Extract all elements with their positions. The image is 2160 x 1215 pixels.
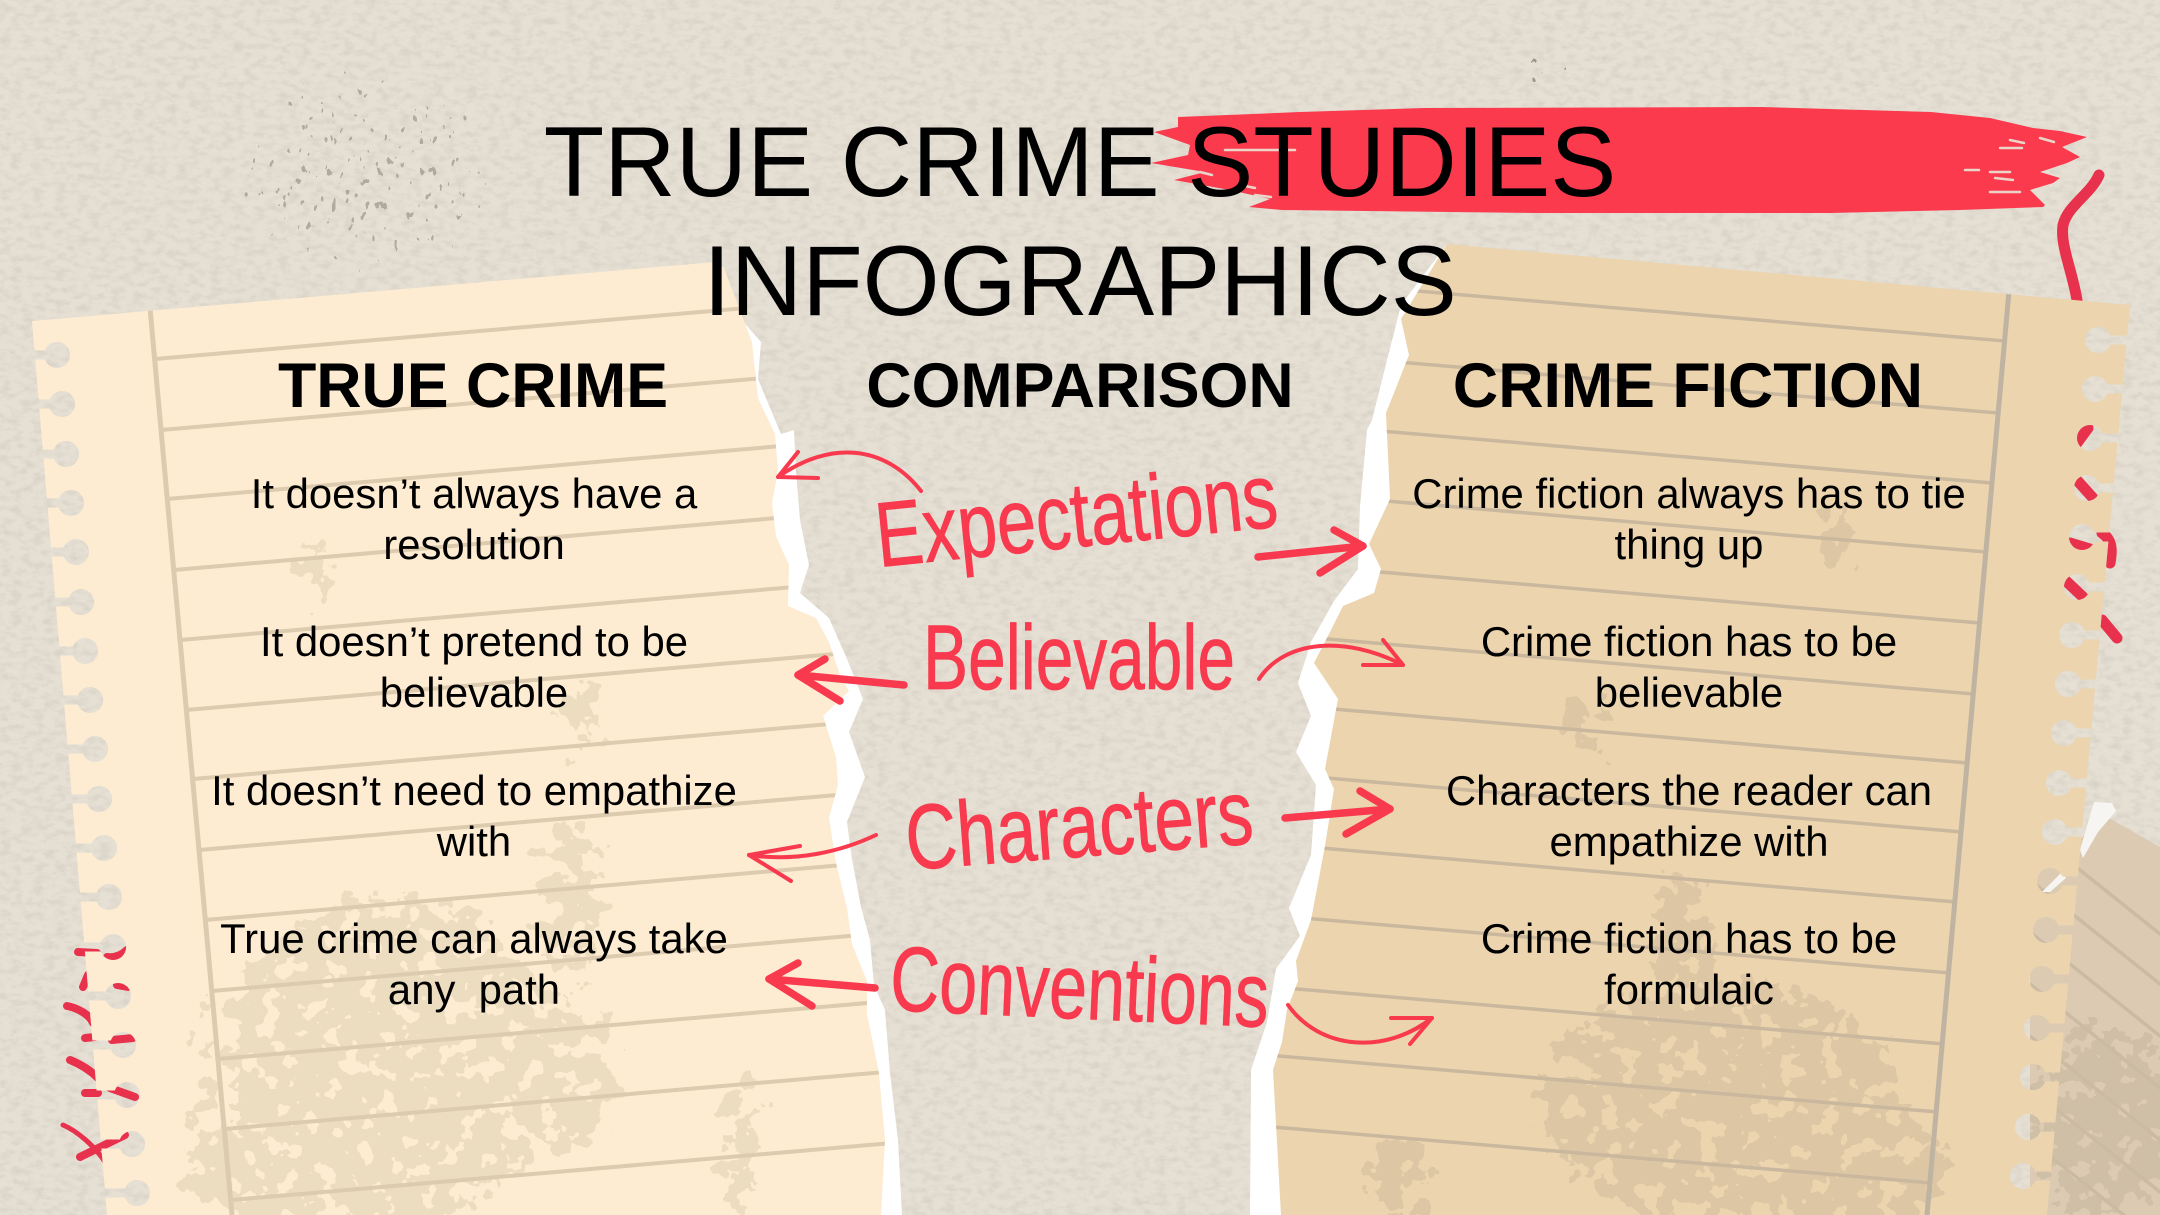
text block: true crime believable: believable <box>380 669 568 716</box>
text block: crime fiction tie up: thing up <box>1615 521 1763 568</box>
arrow: believable to true crime <box>798 659 904 701</box>
text block: crime fiction formulaic <box>1481 915 1897 1013</box>
text block: crime fiction characters: empathize with <box>1549 818 1829 865</box>
title: INFOGRAPHICS <box>703 225 1457 336</box>
arrow: believable to crime fiction <box>1259 640 1403 679</box>
text block: crime fiction characters: Characters the reader can <box>1446 767 1932 814</box>
text block: crime fiction formulaic: Crime fiction has to be <box>1481 915 1897 962</box>
label: conventions: Conventions <box>888 928 1271 1047</box>
torn white edge: right paper <box>1250 244 1460 1215</box>
red scribble behind right paper <box>2063 175 2117 638</box>
text block: crime fiction tie up: Crime fiction always has to tie <box>1412 470 1966 517</box>
title <box>544 106 1616 336</box>
red scribble behind left paper <box>63 950 135 1165</box>
text block: crime fiction believable <box>1481 618 1897 716</box>
column heading: comparison: COMPARISON <box>866 351 1294 421</box>
text block: true crime resolution <box>251 470 698 568</box>
column heading: crime fiction: CRIME FICTION <box>1453 351 1923 421</box>
label: expectations: Expectations <box>871 445 1282 587</box>
text block: crime fiction believable: Crime fiction has to be <box>1481 618 1897 665</box>
arrow: conventions to true crime <box>769 963 875 1006</box>
arrow: conventions to crime fiction <box>1288 1005 1432 1044</box>
arrow: expectations to true crime <box>778 452 921 491</box>
label: believable: Believable <box>923 607 1235 709</box>
text block: true crime empathize <box>211 767 737 865</box>
text block: true crime believable: It doesn’t pretend to be <box>260 618 688 665</box>
torn white edge: left paper <box>700 262 902 1215</box>
text block: true crime resolution: It doesn’t always have a <box>251 470 698 517</box>
text block: true crime path: True crime can always take <box>220 915 728 962</box>
text block: true crime path <box>220 915 728 1013</box>
red brush stroke behind title <box>1151 107 2087 213</box>
arrow: characters to true crime <box>749 835 876 881</box>
text block: true crime resolution: resolution <box>383 521 565 568</box>
arrow: characters to crime fiction <box>1285 791 1390 834</box>
text block: crime fiction formulaic: formulaic <box>1604 966 1774 1013</box>
third paper: bottom right corner <box>2030 802 2160 1215</box>
panel: left notebook paper <box>32 262 885 1215</box>
text block: true crime path: any path <box>388 966 560 1013</box>
text block: true crime believable <box>260 618 688 716</box>
column heading: true crime: TRUE CRIME <box>278 351 668 421</box>
text block: crime fiction characters <box>1446 767 1932 865</box>
text block: true crime empathize: It doesn’t need to empathize <box>211 767 737 814</box>
text block: crime fiction tie up <box>1412 470 1966 568</box>
text block: crime fiction believable: believable <box>1595 669 1783 716</box>
panel: right notebook paper <box>1273 244 2130 1215</box>
label: characters: Characters <box>902 762 1257 890</box>
arrow: expectations to crime fiction <box>1258 530 1363 573</box>
text block: true crime empathize: with <box>436 818 511 865</box>
title: TRUE CRIME STUDIES <box>544 106 1616 217</box>
